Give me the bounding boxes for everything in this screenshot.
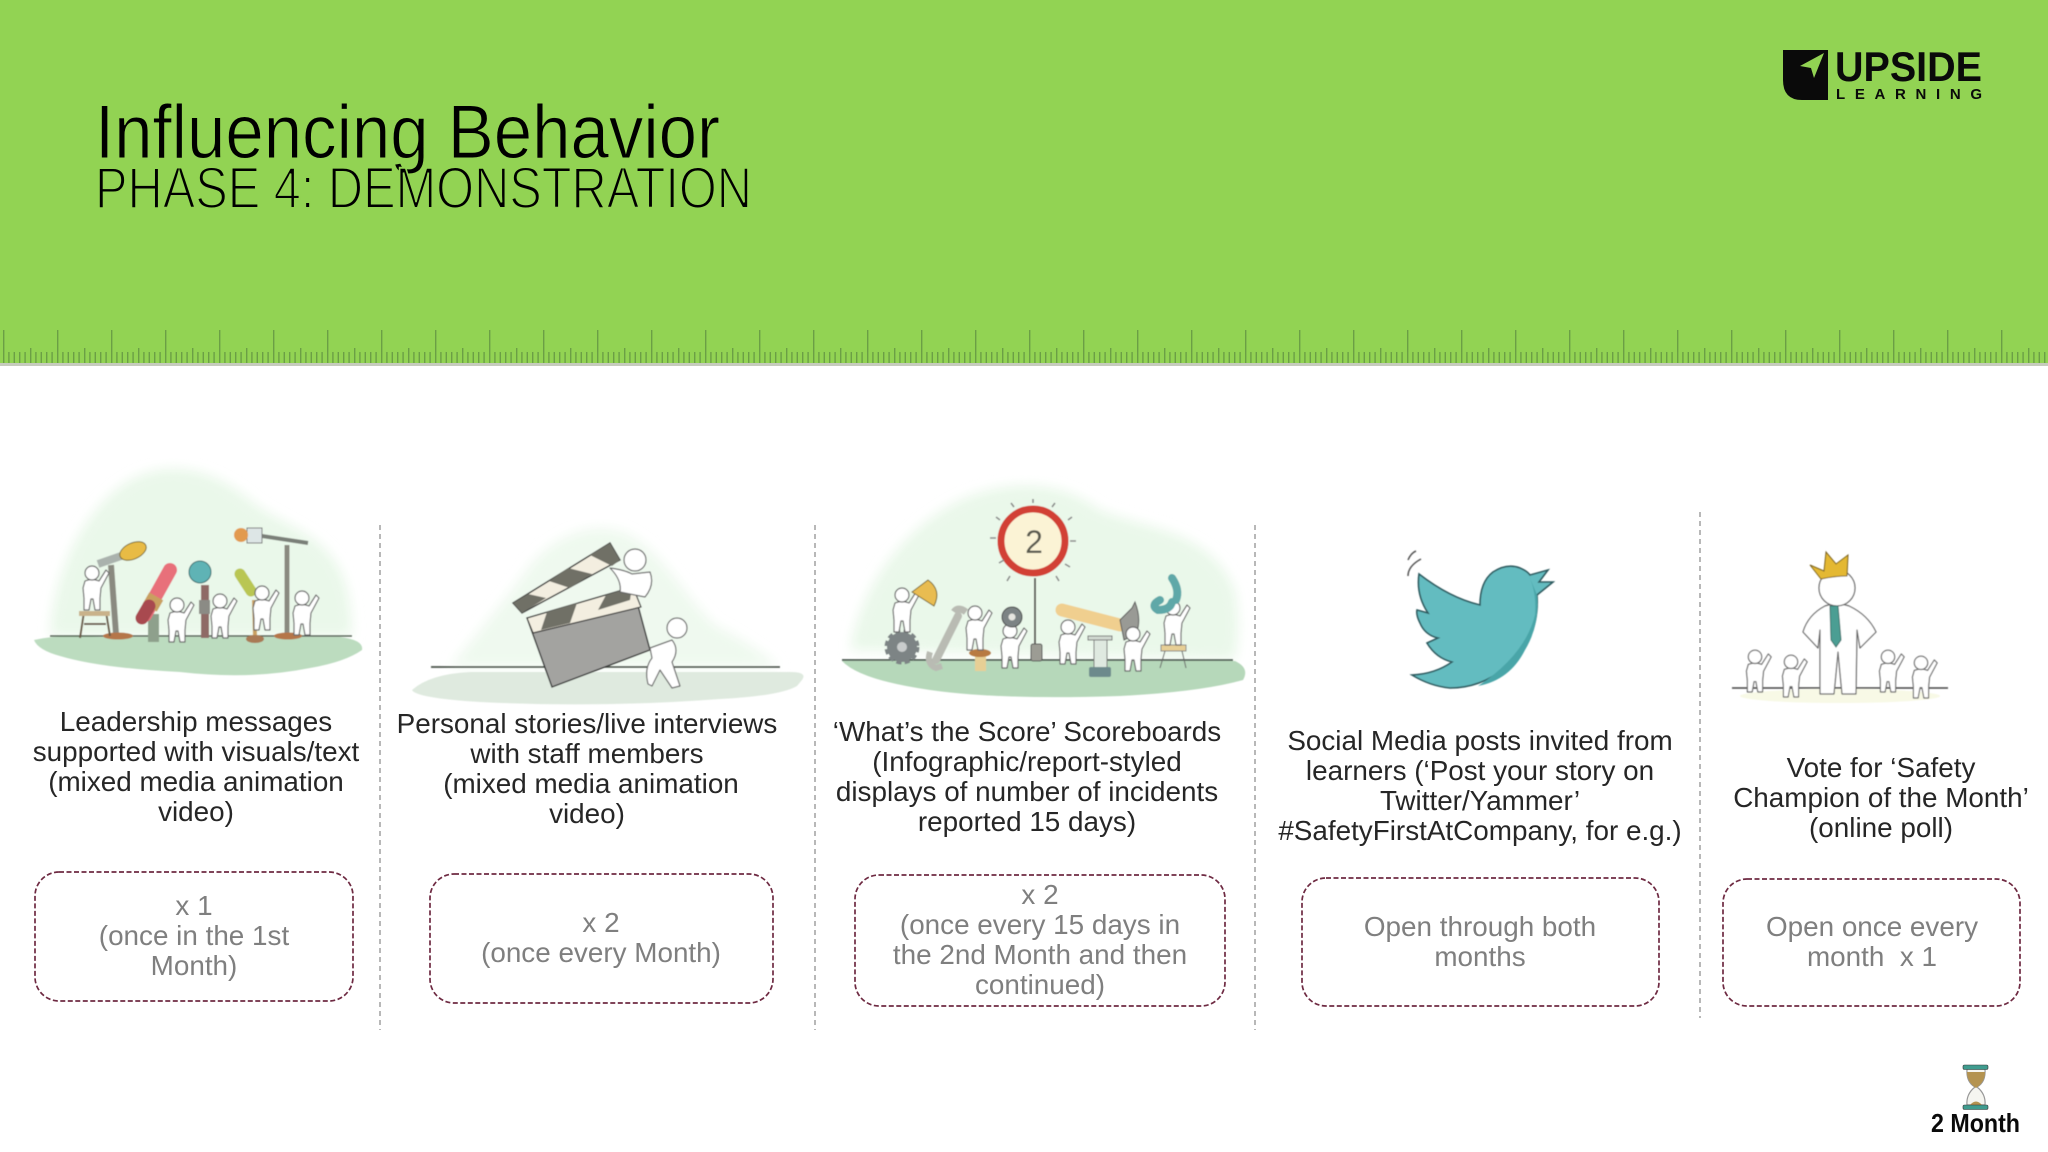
column 4 description [1278,725,1682,846]
column 4 description: learners (‘Post your story on [1306,755,1654,786]
logo arrow [1800,53,1824,78]
illustration: clapperboard [412,528,804,704]
column 3 description: (Infographic/report-styled [872,746,1182,777]
frequency box 5: Open once every [1766,911,1978,942]
frequency box 5 [1723,879,2020,1006]
frequency box 5: month x 1 [1807,941,1937,972]
column 2 description: with staff members [469,738,704,769]
clapperboard body [527,587,650,687]
frequency box 3: continued) [975,969,1105,1000]
score clock [990,499,1076,661]
frequency box 3: (once every 15 days in [900,909,1180,940]
frequency box 2: (once every Month) [481,937,721,968]
logo tagline: LEARNING [1836,86,1982,103]
onlookers [1746,650,1937,698]
bolt [1088,636,1112,677]
nut person [1001,607,1027,668]
mic 1 [79,538,149,640]
column 2 description: (mixed media animation [443,768,739,799]
column 4 description: #SafetyFirstAtCompany, for e.g.) [1278,815,1682,846]
column 2 description: video) [549,798,625,829]
column 1 description: (mixed media animation [48,766,344,797]
mic 3 [189,561,237,638]
frequency box 1 [35,872,353,1001]
frequency box 3: the 2nd Month and then [893,939,1187,970]
phone person on stool [1154,578,1190,668]
frequency box 3: x 2 [1021,879,1059,910]
frequency box 4 [1302,878,1659,1006]
column 1 description: Leadership messages [60,706,332,737]
megaphone person on gear [887,580,937,662]
divider [814,525,816,1030]
mic 4 [240,574,279,643]
column 1 description: video) [158,796,234,827]
illustration: crowned champion [1732,552,1948,703]
logo icon [1783,50,1828,100]
wrench person [929,606,992,671]
column 3 description [833,716,1221,837]
logo: Upside Learning [1783,43,1982,103]
column 3 description: displays of number of incidents [836,776,1218,807]
title: Influencing Behavior [95,90,720,175]
illustration: scoreboard [842,485,1245,697]
column 3 description: ‘What’s the Score’ Scoreboards [833,716,1221,747]
frequency box 1: (once in the 1st [99,920,289,951]
column 2 description: Personal stories/live interviews [397,708,777,739]
champion [1803,552,1876,694]
column 5 description: (online poll) [1809,812,1953,843]
worker at side [647,618,687,688]
column 2 description [397,708,777,829]
column 1 description [33,706,360,827]
mic 2 [142,570,194,642]
frequency box 2: x 2 [582,907,620,938]
subtitle: PHASE 4: DEMONSTRATION [95,156,752,221]
score clock: 2 [1025,524,1043,560]
column 4 description: Social Media posts invited from [1287,725,1673,756]
frequency box 4: Open through both [1364,911,1596,942]
icon: hourglass [1963,1065,1988,1110]
mic 5 [234,528,319,640]
duration label: 2 Month [1931,1108,2020,1138]
worker on top [610,549,652,597]
hammer people [1059,602,1150,671]
frequency box 1: x 1 [175,890,213,921]
column 4 description: Twitter/Yammer’ [1380,785,1580,816]
frequency box 1: Month) [151,950,237,981]
column 5 description: Champion of the Month’ [1733,782,2029,813]
column 1 description: supported with visuals/text [33,736,360,767]
frequency box 4: months [1434,941,1526,972]
logo wordmark: UPSIDE [1835,43,1982,90]
frequency box 2 [430,874,773,1003]
divider [379,525,381,1030]
header band [0,0,2048,366]
column 5 description: Vote for ‘Safety [1787,752,1975,783]
illustration: microphones and people [34,469,362,675]
frequency box 3 [855,875,1225,1006]
divider [1254,525,1256,1030]
illustration: twitter bird [1408,551,1553,688]
column 5 description [1733,752,2029,843]
divider [1699,512,1701,1018]
column 3 description: reported 15 days) [918,806,1136,837]
clapperboard arm [513,543,620,613]
